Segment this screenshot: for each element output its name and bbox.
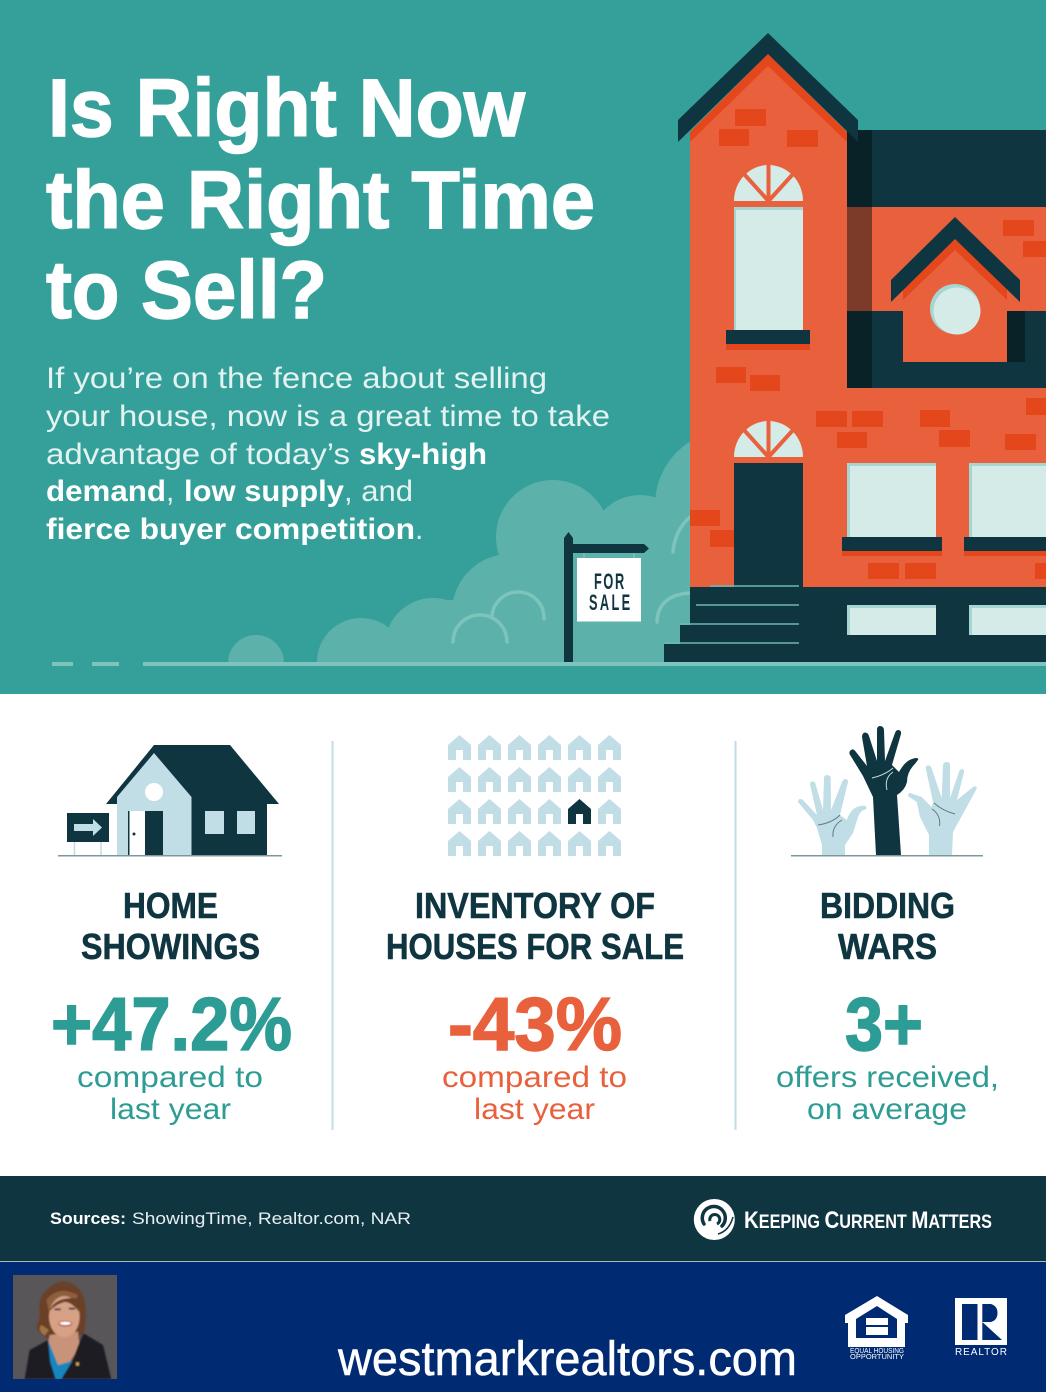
for sale sign [564, 532, 649, 662]
heading: bidding wars [820, 885, 955, 967]
logo: equal housing opportunity: EQUAL HOUSING [850, 1348, 904, 1355]
intro paragraph: sky-high [359, 438, 487, 471]
intro paragraph: advantage of today’s [46, 438, 350, 471]
stat caption [442, 1061, 627, 1126]
intro paragraph: , [166, 475, 174, 508]
intro paragraph: , and [344, 475, 413, 508]
upper wing wall [847, 207, 1046, 388]
sources text: Sources: [50, 1209, 126, 1228]
heading: inventory of houses for sale [386, 885, 684, 967]
icon: grid of houses [448, 735, 621, 856]
stat caption: last year [474, 1093, 595, 1126]
stat: 3+: 3+ [845, 982, 923, 1066]
logo: keeping current matters [694, 1199, 992, 1240]
stat: +47.2%: +47.2% [51, 982, 292, 1066]
heading: home showings [81, 885, 260, 967]
logo: keeping current matters: KEEPING CURRENT MATTERS [744, 1207, 992, 1234]
illustration: brick house [664, 33, 1046, 662]
stat caption: offers received, [776, 1061, 999, 1094]
intro paragraph: your house, now is a great time to take [46, 400, 610, 433]
icon: house with sign [58, 745, 282, 856]
logo: equal housing opportunity [845, 1296, 908, 1361]
stat: -43%: -43% [448, 982, 622, 1066]
upper arched window [726, 165, 810, 350]
title [46, 63, 595, 336]
bricks [690, 109, 1046, 579]
panel: hero background [0, 0, 1046, 694]
sources text: ShowingTime, Realtor.com, NAR [132, 1209, 411, 1228]
panel: sources bar [0, 1176, 1046, 1261]
title: Is Right Now [48, 63, 525, 154]
column 3: bidding wars [776, 885, 999, 1126]
foundation and steps [664, 586, 1046, 662]
panel: agent footer [0, 1261, 1046, 1392]
agent photo [13, 1275, 117, 1379]
heading: home showings: HOME [123, 885, 218, 926]
stat caption: compared to [77, 1061, 263, 1094]
tower roof [678, 33, 858, 142]
stat caption: last year [110, 1093, 231, 1126]
intro paragraph: . [415, 513, 423, 546]
sources text [50, 1209, 411, 1228]
column dividers [332, 741, 736, 1130]
for sale sign: FOR [594, 569, 624, 594]
heading: inventory of houses for sale: HOUSES FOR SALE [386, 926, 684, 967]
logo: realtor: REALTOR [955, 1347, 1007, 1358]
icon: raised hands [791, 726, 983, 856]
ground line [52, 662, 1046, 666]
logo: realtor [955, 1298, 1007, 1358]
dormer [891, 217, 1020, 362]
heading: bidding wars: BIDDING [820, 885, 955, 926]
for sale sign: SALE [589, 590, 630, 615]
heading: home showings: SHOWINGS [81, 926, 260, 967]
title: to Sell? [46, 245, 327, 336]
lower windows [842, 463, 1046, 556]
title: the Right Time [46, 155, 595, 246]
heading: bidding wars: WARS [838, 926, 937, 967]
intro paragraph [46, 362, 610, 546]
intro paragraph: fierce buyer competition [46, 513, 415, 546]
stat caption [77, 1061, 263, 1126]
tower and lower wall [690, 54, 1046, 587]
intro paragraph: If you’re on the fence about selling [46, 362, 547, 395]
door with fanlight [734, 421, 803, 587]
stat caption [776, 1061, 999, 1126]
intro paragraph: demand [46, 475, 166, 508]
upper wing roof [847, 130, 1046, 207]
column 1: home showings [51, 885, 292, 1126]
website: westmarkrealtors.com [337, 1333, 797, 1386]
stat caption: on average [807, 1093, 967, 1126]
column 2: inventory [386, 885, 684, 1126]
bushes [228, 442, 690, 662]
heading: inventory of houses for sale: INVENTORY OF [415, 885, 655, 926]
logo: equal housing opportunity: OPPORTUNITY [850, 1354, 904, 1361]
panel: stats background [0, 694, 1046, 1176]
intro paragraph: low supply [184, 475, 344, 508]
stat caption: compared to [442, 1061, 627, 1094]
